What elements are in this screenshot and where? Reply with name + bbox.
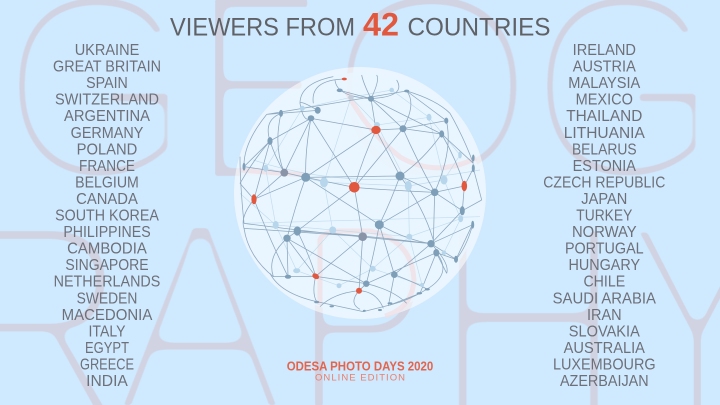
right country list: MEXICO [576,92,633,109]
left country list: PHILIPPINES [63,224,151,241]
left country list: ARGENTINA [64,108,151,125]
right country list: AUSTRALIA [564,340,646,357]
right country list: THAILAND [566,108,642,125]
left country list: SWITZERLAND [55,92,159,109]
front nodes [242,88,475,312]
front links [240,75,482,312]
globe rim [234,67,486,319]
faint letter traces seen through the globe [240,92,476,316]
title: VIEWERS FROM [170,14,355,42]
left country list: MACEDONIA [62,307,153,324]
title: COUNTRIES [408,14,550,42]
right country list: PORTUGAL [565,241,644,258]
edition label: ONLINE EDITION [315,372,405,384]
right country list: MALAYSIA [568,75,641,92]
left country list: NETHERLANDS [54,274,160,291]
left country list: SWEDEN [77,290,137,307]
right country list: LUXEMBOURG [553,356,656,373]
globe network [234,67,486,319]
right country list: NORWAY [572,224,637,241]
left country list [53,42,161,390]
left country list: UKRAINE [75,42,139,59]
left country list: FRANCE [79,158,135,175]
title: 42 [363,6,399,42]
left country list: GERMANY [71,125,143,142]
left country list: GREAT BRITAIN [53,59,161,76]
right country list: IRAN [587,307,622,324]
left country list: BELGIUM [75,174,139,191]
left country list: POLAND [77,141,137,158]
left country list: GREECE [80,356,134,373]
right country list: SLOVAKIA [569,323,640,340]
right country list: CZECH REPUBLIC [543,174,665,191]
left country list: CANADA [76,191,138,208]
globe inner disc [240,72,480,314]
right country list: HUNGARY [568,257,640,274]
left country list: SOUTH KOREA [55,208,159,224]
right country list: JAPAN [581,191,627,208]
right country list: AZERBAIJAN [560,373,649,390]
left country list: CAMBODIA [67,241,147,258]
left country list: SPAIN [86,75,128,92]
left country list: SINGAPORE [65,257,149,274]
right country list: AUSTRIA [573,59,636,76]
right country list: SAUDI ARABIA [553,290,657,307]
left country list: INDIA [86,373,129,390]
right country list: IRELAND [573,42,636,59]
event name: ODESA PHOTO DAYS 2020 [287,358,433,373]
left country list: EGYPT [85,340,129,357]
right country list: LITHUANIA [564,125,645,142]
right country list: ESTONIA [573,158,637,175]
highlighted red nodes [251,78,467,294]
back links [240,90,480,286]
right country list: TURKEY [576,208,632,224]
left country list: ITALY [88,323,126,340]
right country list: CHILE [583,274,625,291]
title [170,6,550,42]
right country list: BELARUS [572,141,637,158]
back nodes [263,88,463,288]
right country list [543,42,665,390]
